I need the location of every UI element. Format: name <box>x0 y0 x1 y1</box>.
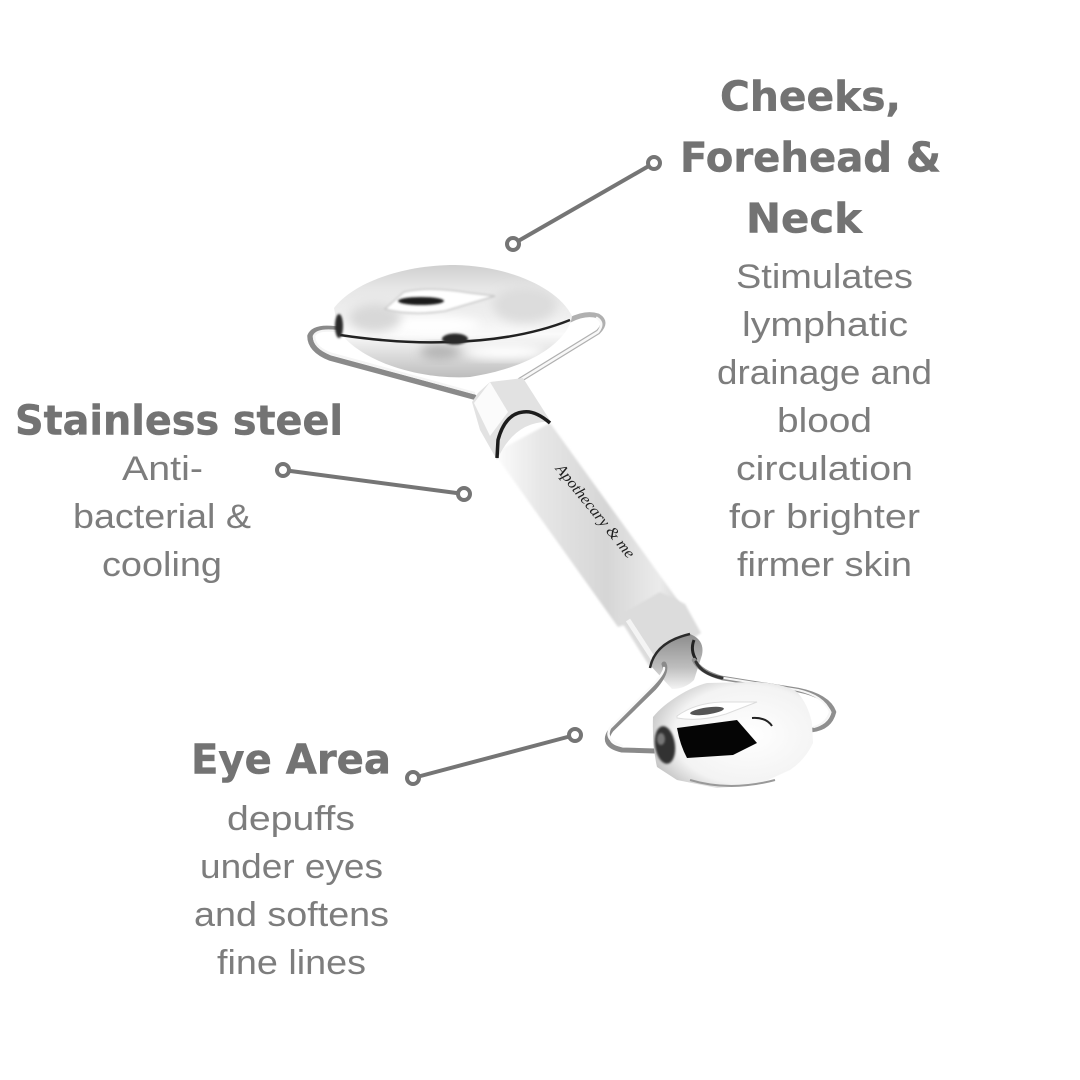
connector: cheeks <box>507 157 660 250</box>
text: eye area description: fine lines <box>217 944 366 982</box>
heading: cheeks, forehead and neck: Neck <box>746 194 864 242</box>
text: cheeks description: drainage and <box>717 354 932 392</box>
heading: stainless steel: Stainless steel <box>15 396 343 444</box>
roller wire frame: bottom <box>607 660 834 751</box>
heading: cheeks, forehead and neck: Forehead & <box>680 134 941 182</box>
text: eye area description: depuffs <box>227 800 355 838</box>
roller wire frame: top <box>310 315 603 397</box>
text: stainless steel description: bacterial & <box>73 498 251 536</box>
text: cheeks description <box>717 258 932 584</box>
heading: cheeks, forehead and neck <box>680 72 941 242</box>
text: eye area description <box>194 800 389 982</box>
text: eye area description: and softens <box>194 896 389 934</box>
connector: eye area <box>407 729 581 784</box>
text: cheeks description: firmer skin <box>737 546 912 584</box>
engraved brand text: Apothecary & me <box>551 460 638 562</box>
text: stainless steel description <box>73 450 251 584</box>
connector: stainless steel <box>277 464 470 500</box>
text: cheeks description: Stimulates <box>736 258 913 296</box>
text: cheeks description: lymphatic <box>742 306 908 344</box>
heading: cheeks, forehead and neck: Cheeks, <box>720 72 901 120</box>
text: cheeks description: blood <box>777 402 872 440</box>
infographic canvas <box>18 79 940 974</box>
handle <box>472 378 701 667</box>
text: stainless steel description: cooling <box>102 546 222 584</box>
text: cheeks description: for brighter <box>729 498 920 536</box>
handle lower cup <box>650 634 702 689</box>
text: eye area description: under eyes <box>200 848 383 886</box>
small roller head <box>652 682 813 788</box>
heading: eye area: Eye Area <box>191 736 391 784</box>
illustration: facial roller <box>310 265 834 788</box>
large roller head <box>334 265 572 377</box>
text: cheeks description: circulation <box>736 450 913 488</box>
text: stainless steel description: Anti- <box>122 450 203 488</box>
